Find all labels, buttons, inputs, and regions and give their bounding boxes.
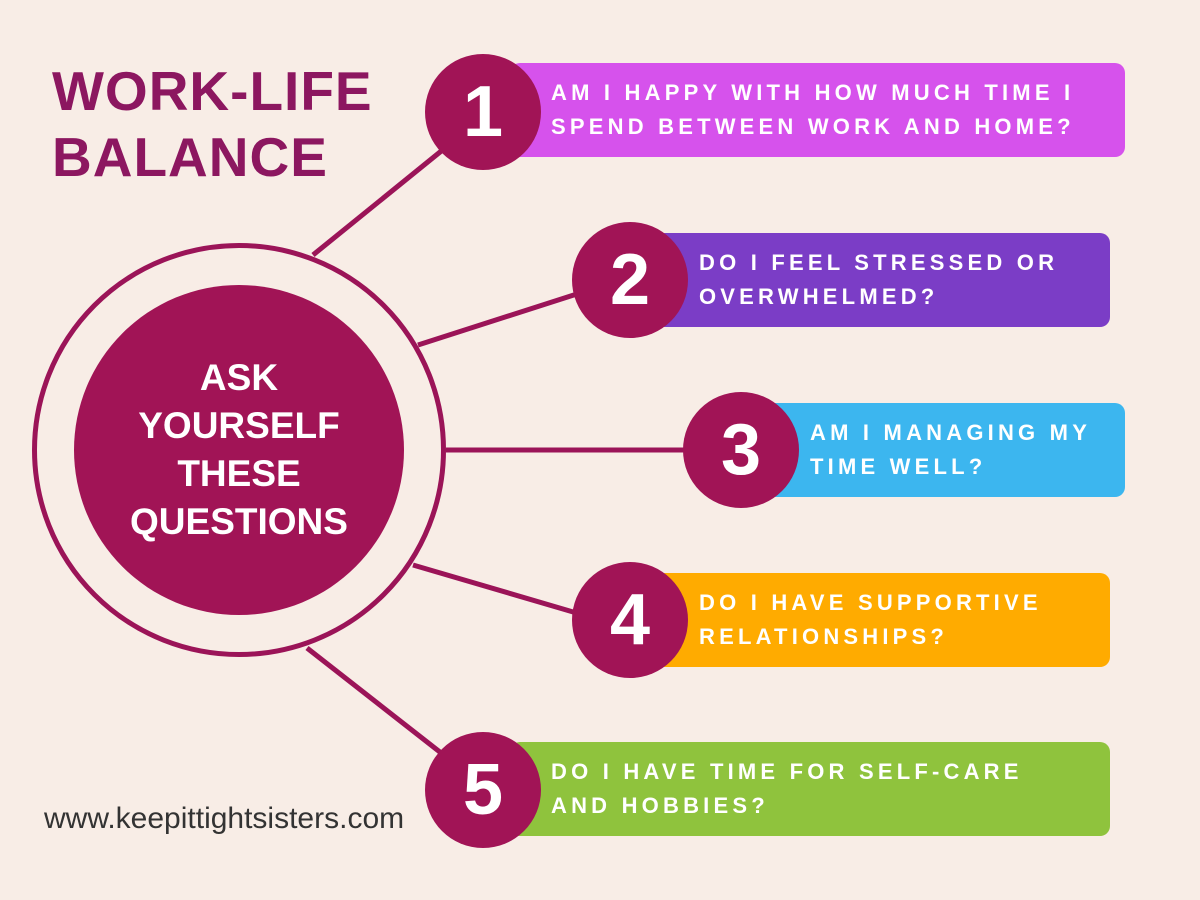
item 4 bar: DO I HAVE SUPPORTIVE (699, 590, 1042, 615)
item 5 bar: DO I HAVE TIME FOR SELF-CARE (551, 759, 1023, 784)
item 2 number: 2 (610, 240, 650, 320)
item 5 bar: AND HOBBIES? (551, 793, 769, 818)
item 1 bar: SPEND BETWEEN WORK AND HOME? (551, 114, 1075, 139)
item 2 bar: OVERWHELMED? (699, 284, 938, 309)
item 1 number: 1 (463, 72, 503, 152)
title (52, 60, 373, 188)
item 5 number (425, 732, 541, 848)
item 1 bar: AM I HAPPY WITH HOW MUCH TIME I (551, 80, 1074, 105)
inner circle with text: QUESTIONS (130, 501, 348, 542)
item 3 bar (765, 403, 1125, 497)
item 3 bar: AM I MANAGING MY (810, 420, 1091, 445)
inner circle with text: YOURSELF (138, 405, 340, 446)
item 4 number (572, 562, 688, 678)
item 2 bar: DO I FEEL STRESSED OR (699, 250, 1058, 275)
title: BALANCE (52, 126, 328, 188)
inner circle with text: THESE (177, 453, 301, 494)
item 3 number: 3 (721, 410, 761, 490)
inner circle with text: ASK (200, 357, 278, 398)
title: WORK-LIFE (52, 60, 373, 122)
item 4 bar (655, 573, 1110, 667)
item 2 bar (655, 233, 1110, 327)
item 5 number: 5 (463, 750, 503, 830)
item 4 number: 4 (610, 580, 650, 660)
item 3 bar: TIME WELL? (810, 454, 986, 479)
item 1 number (425, 54, 541, 170)
item 4 bar: RELATIONSHIPS? (699, 624, 948, 649)
item 1 bar (510, 63, 1125, 157)
item 2 number (572, 222, 688, 338)
website url: www.keepittightsisters.com (44, 802, 404, 835)
item 3 number (683, 392, 799, 508)
item 5 bar (510, 742, 1110, 836)
central circle (32, 243, 446, 657)
inner circle with text (74, 285, 404, 615)
